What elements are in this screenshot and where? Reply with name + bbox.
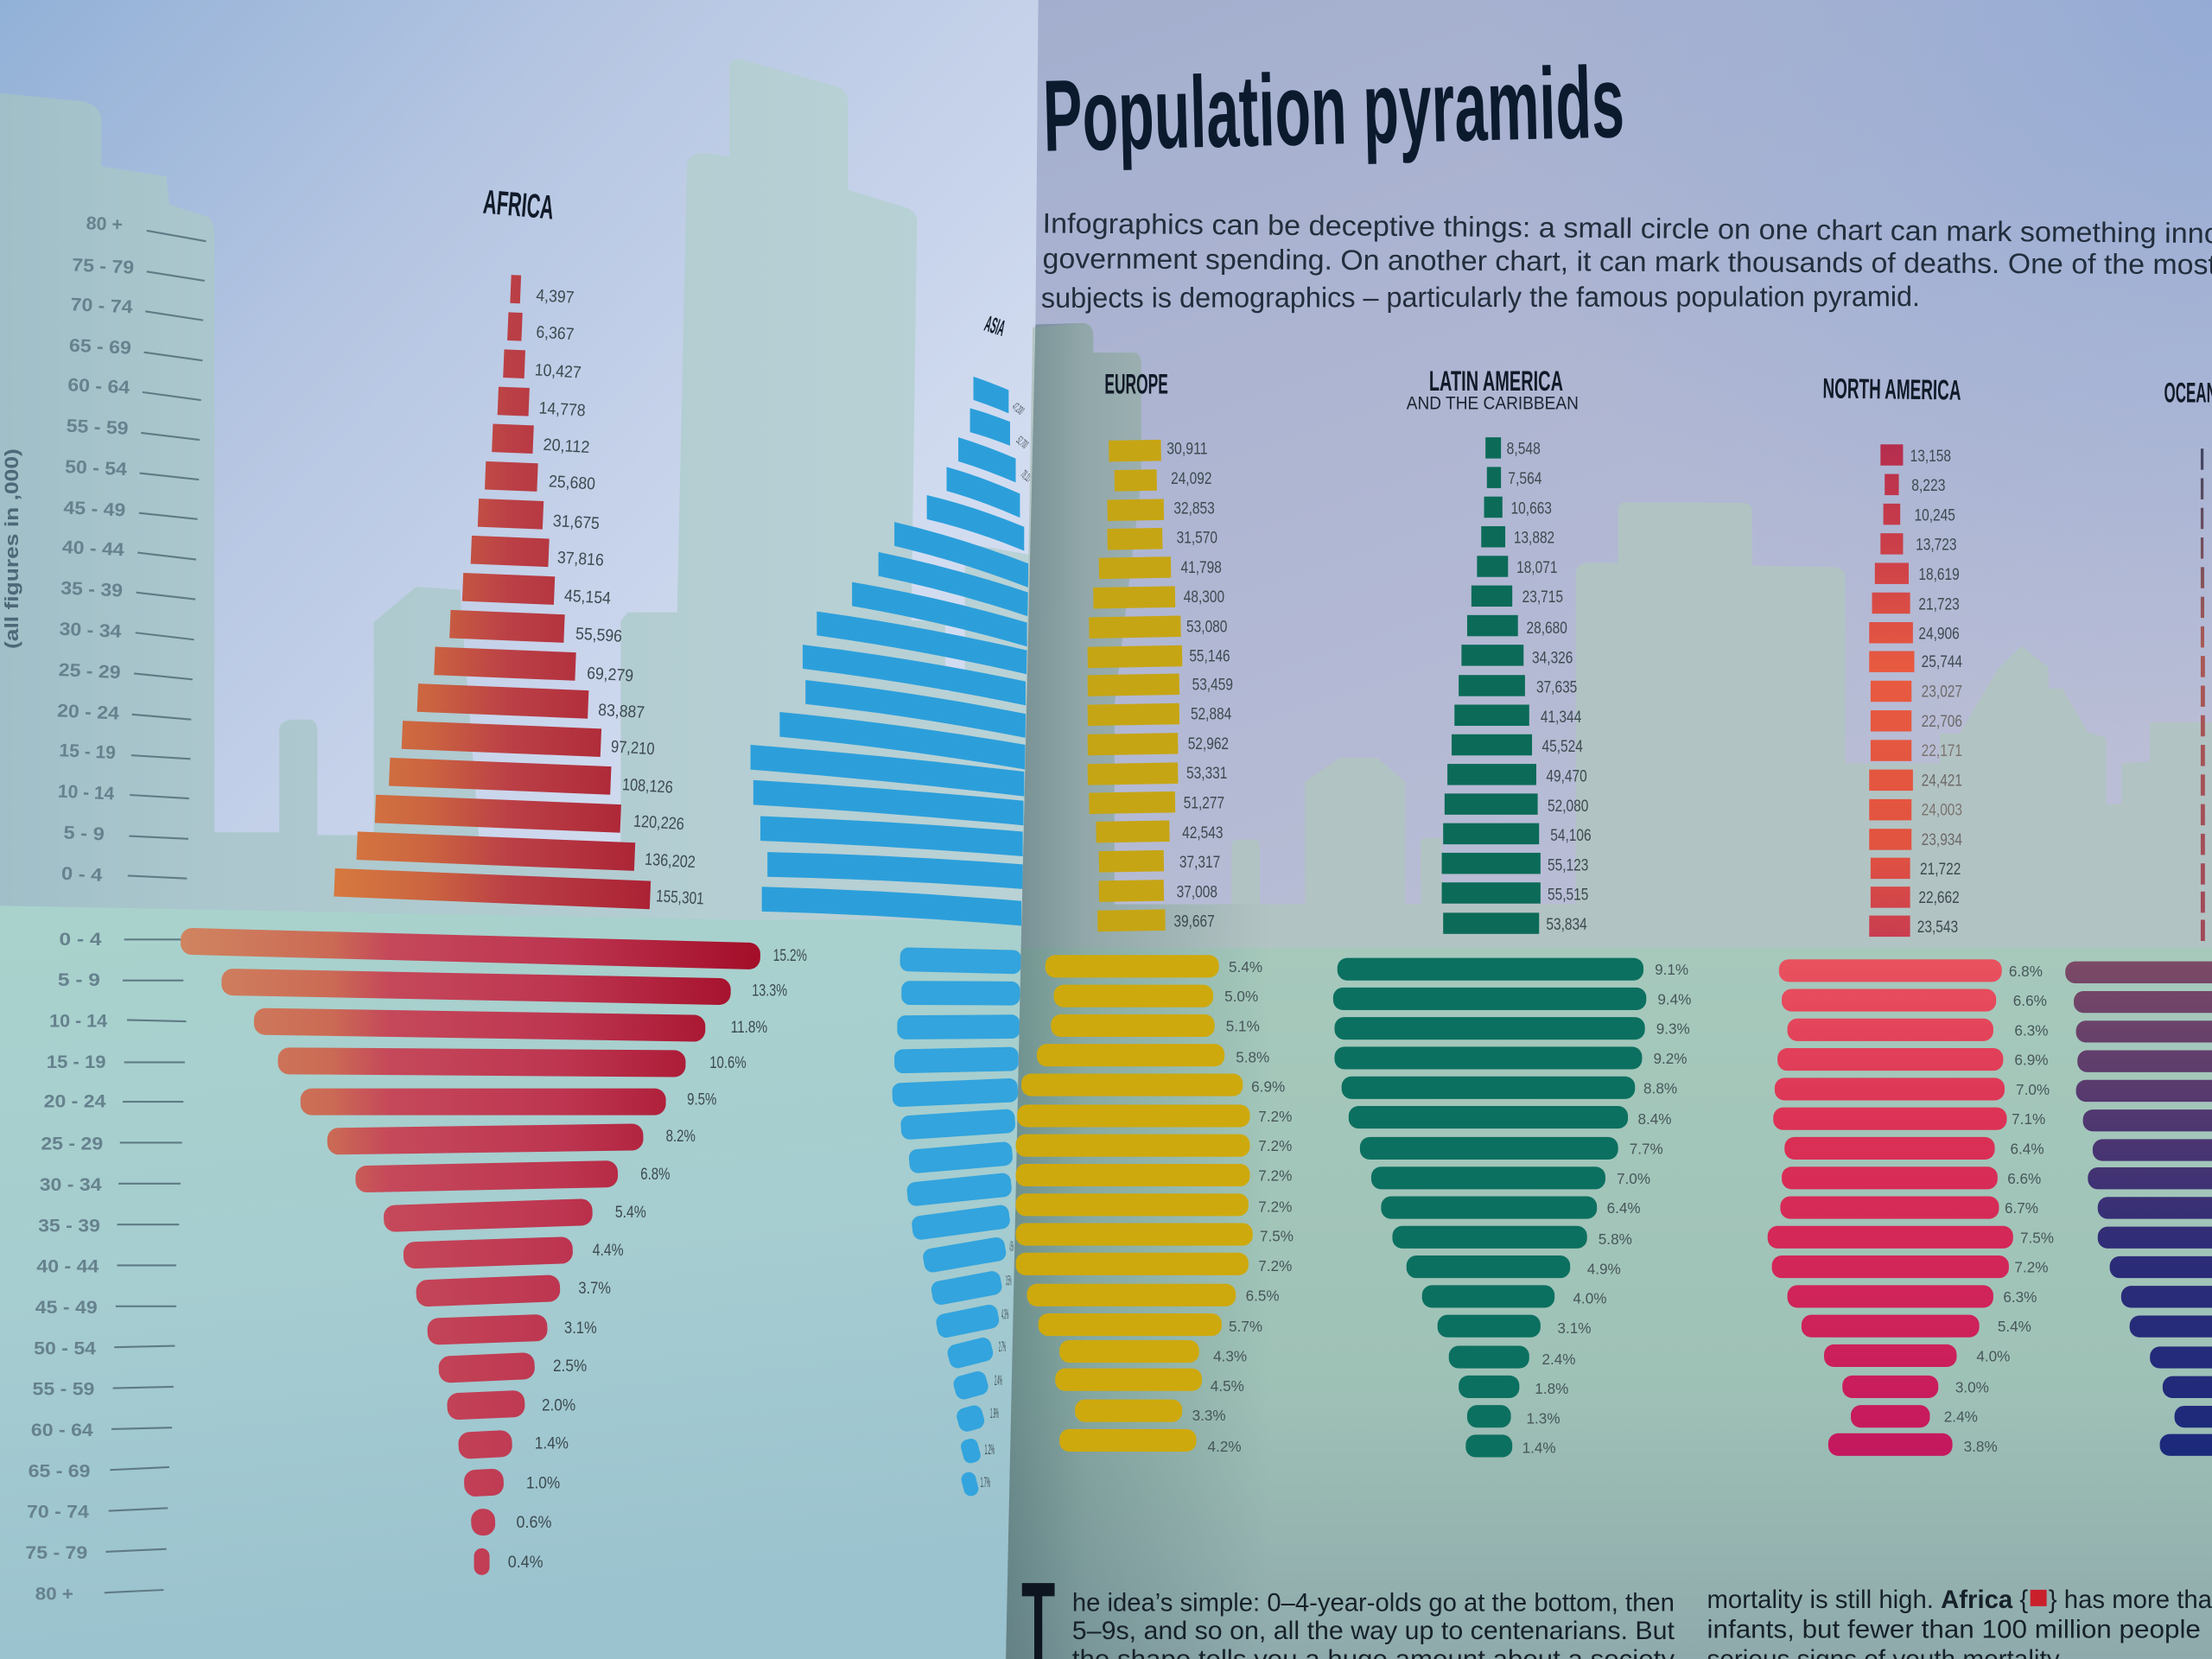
North America percentage values: 4.0% — [1976, 1348, 2010, 1365]
age labels upper — [57, 213, 135, 886]
Europe population values: 48,300 — [1184, 588, 1224, 607]
Africa population values: 14,778 — [538, 398, 586, 421]
panel: Africa pyramid — [181, 184, 807, 1575]
Latin America percentage values: 7.7% — [1630, 1141, 1663, 1158]
North America percentage values — [1944, 963, 2054, 1455]
Africa population values: 45,154 — [563, 587, 612, 608]
Latin America population values: 55,515 — [1548, 886, 1588, 905]
North America percentage values: 6.6% — [2007, 1170, 2041, 1187]
age labels upper: 45 - 49 — [63, 498, 126, 520]
Europe percentage values: 7.2% — [1258, 1137, 1292, 1154]
age labels upper: 25 - 29 — [58, 660, 121, 683]
panel: Europe pyramid — [1016, 368, 1294, 1455]
Asia population bars — [751, 377, 1028, 925]
heading: Europe: EUROPE — [1104, 368, 1168, 400]
Latin America percentage values: 8.8% — [1643, 1079, 1677, 1096]
Asia percentage values: 1.2% — [985, 1442, 995, 1458]
column one: 5–9s, and so on, all the way up to centenarians. But — [1072, 1617, 1675, 1645]
Europe population values: 55,146 — [1189, 647, 1230, 666]
Latin America percentage bars — [1333, 958, 1646, 1458]
Africa population values: 136,202 — [645, 850, 696, 872]
Africa percentage values: 6.8% — [640, 1165, 671, 1184]
Asia population values — [1010, 400, 1035, 485]
Africa percentage values: 8.2% — [666, 1127, 696, 1146]
Europe population values — [1166, 440, 1233, 931]
North America percentage values: 5.4% — [1998, 1318, 2031, 1335]
Europe population values: 41,798 — [1181, 558, 1222, 577]
North America population values: 13,158 — [1910, 447, 1951, 466]
Europe percentage values: 5.8% — [1236, 1048, 1269, 1065]
Europe population values: 52,884 — [1191, 705, 1231, 724]
Europe percentage values: 7.2% — [1258, 1167, 1292, 1185]
column one: he idea’s simple: 0–4-year-olds go at the bottom, then — [1072, 1588, 1675, 1617]
North America percentage values: 3.8% — [1964, 1438, 1998, 1455]
North America percentage values: 6.6% — [2013, 992, 2047, 1009]
body text: drop cap and two columns — [1021, 1559, 2212, 1659]
subheading: and the Caribbean: AND THE CARIBBEAN — [1407, 393, 1579, 413]
Europe population values: 31,570 — [1177, 529, 1217, 548]
age axis: upper left — [57, 213, 206, 886]
age ticks lower — [105, 939, 187, 1592]
Africa population values: 10,427 — [534, 360, 582, 383]
North America population values: 23,543 — [1917, 918, 1958, 937]
Africa percentage values: 1.0% — [526, 1473, 560, 1492]
Latin America percentage values: 9.3% — [1656, 1020, 1690, 1038]
Latin America percentage values: 9.4% — [1657, 990, 1691, 1007]
Latin America population values: 37,635 — [1536, 678, 1577, 697]
Africa percentage bars — [181, 928, 760, 1575]
Africa population values: 6,367 — [536, 323, 575, 344]
Latin America percentage values — [1522, 961, 1691, 1457]
skyline: right page buildings — [1021, 323, 2212, 959]
Latin America percentage values: 1.8% — [1535, 1380, 1568, 1397]
Europe percentage values: 5.1% — [1226, 1017, 1260, 1034]
Latin America population values: 53,834 — [1546, 915, 1587, 934]
spine shadow — [1006, 323, 1269, 1659]
Africa percentage values: 2.5% — [553, 1357, 587, 1376]
Africa population values: 120,226 — [632, 812, 685, 834]
panel: Oceania pyramid — [2065, 376, 2212, 1456]
Oceania population bars — [2201, 448, 2205, 941]
North America percentage values: 2.4% — [1944, 1408, 1978, 1426]
age labels lower: 40 - 44 — [36, 1257, 99, 1277]
Latin America population values: 54,106 — [1550, 826, 1592, 845]
Africa population values: 97,210 — [610, 737, 655, 759]
Africa percentage values: 5.4% — [615, 1203, 646, 1222]
intro paragraph: government spending. On another chart, it can mark thousands of deaths. One of the most — [1042, 242, 2212, 280]
column two — [1707, 1579, 2212, 1659]
North America percentage values: 6.8% — [2009, 963, 2043, 980]
Europe percentage values: 5.7% — [1229, 1318, 1262, 1335]
Europe percentage values: 7.5% — [1260, 1228, 1294, 1245]
infographic canvas: magazine spread: 78,117 — [1018, 467, 1035, 485]
Latin America percentage values: 5.8% — [1599, 1230, 1632, 1248]
Africa percentage values: 13.3% — [752, 982, 787, 1001]
panel: North America pyramid — [1768, 372, 2054, 1456]
North America population values — [1910, 447, 1962, 937]
Latin America population values: 55,123 — [1548, 855, 1588, 874]
age labels lower: 80 + — [35, 1584, 73, 1604]
panel: Asia pyramid: 2.7% — [999, 1339, 1006, 1355]
Oceania percentage bars — [2065, 962, 2212, 1456]
age labels lower: 75 - 79 — [25, 1543, 87, 1563]
North America population values: 21,723 — [1918, 594, 1960, 613]
age labels upper: 70 - 74 — [70, 295, 133, 317]
panel: Asia pyramid: 4.5% — [1009, 1239, 1014, 1255]
axis note: all figures in thousands: (all figures in ,000) — [1, 448, 22, 649]
Latin America population values: 52,080 — [1548, 797, 1588, 816]
Latin America population values: 28,680 — [1527, 619, 1567, 638]
age labels upper: 10 - 14 — [57, 782, 115, 804]
age labels lower: 70 - 74 — [27, 1503, 89, 1522]
North America percentage values: 7.1% — [2012, 1110, 2045, 1128]
North America population values: 22,706 — [1922, 712, 1962, 731]
Europe percentage values: 4.2% — [1208, 1438, 1242, 1455]
Europe percentage values: 4.5% — [1211, 1377, 1244, 1395]
Asia population values: 52,700 — [1014, 434, 1031, 451]
age labels lower: 60 - 64 — [31, 1421, 93, 1440]
Europe population bars — [1088, 440, 1182, 931]
North America population values: 18,619 — [1918, 565, 1960, 584]
Latin America population bars — [1442, 437, 1541, 934]
Africa percentage values: 11.8% — [731, 1018, 767, 1037]
column one — [1072, 1588, 1675, 1659]
Asia percentage values: 1.7% — [981, 1475, 990, 1491]
North America percentage values: 7.0% — [2016, 1081, 2050, 1098]
Europe percentage values: 6.5% — [1246, 1287, 1280, 1304]
age labels upper: 50 - 54 — [65, 457, 128, 480]
Europe percentage bars — [1016, 955, 1253, 1452]
Latin America percentage values: 1.3% — [1527, 1409, 1560, 1427]
Africa population bars — [334, 275, 651, 909]
age labels lower: 55 - 59 — [33, 1380, 95, 1400]
North America population values: 25,744 — [1922, 652, 1962, 671]
North America population values: 24,003 — [1922, 801, 1962, 820]
age labels upper: 60 - 64 — [67, 375, 130, 397]
Latin America population values: 7,564 — [1508, 469, 1542, 488]
North America population values: 23,934 — [1922, 830, 1962, 849]
Europe population values: 24,092 — [1171, 469, 1211, 488]
Africa population values: 108,126 — [621, 775, 673, 798]
heading: North America: NORTH AMERICA — [1822, 372, 1961, 406]
Europe population values: 37,317 — [1179, 853, 1220, 872]
North America percentage bars — [1768, 959, 2013, 1456]
age labels upper: 35 - 39 — [60, 578, 124, 601]
age labels lower — [25, 930, 107, 1604]
age labels lower: 35 - 39 — [38, 1216, 100, 1236]
Europe percentage values: 4.3% — [1213, 1348, 1247, 1365]
age labels upper: 5 - 9 — [63, 823, 105, 844]
North America population bars — [1869, 444, 1915, 937]
age labels upper: 65 - 69 — [69, 336, 132, 359]
North America population values: 21,722 — [1920, 860, 1961, 879]
Africa percentage values: 9.5% — [687, 1090, 716, 1109]
North America population values: 22,662 — [1918, 888, 1960, 907]
Europe population values: 53,459 — [1192, 675, 1233, 694]
Latin America population values: 8,548 — [1507, 440, 1541, 459]
age labels upper: 20 - 24 — [57, 701, 120, 724]
Europe population values: 53,080 — [1186, 617, 1227, 636]
panel: Asia pyramid — [751, 310, 1035, 1497]
North America percentage values: 6.4% — [2011, 1141, 2044, 1158]
heading: Africa: AFRICA — [482, 184, 556, 227]
Asia percentage values: 1.9% — [990, 1406, 999, 1421]
Africa percentage values: 2.0% — [542, 1396, 575, 1415]
panel: right page background with skyline — [1006, 0, 2212, 1659]
age labels upper: 75 - 79 — [72, 256, 135, 278]
column two: infants, but fewer than 100 million people — [1707, 1616, 2201, 1644]
Latin America percentage values: 3.1% — [1557, 1319, 1591, 1337]
Latin America population values: 18,071 — [1516, 558, 1557, 577]
Africa percentage values: 4.4% — [593, 1241, 624, 1260]
Africa population values: 69,279 — [587, 664, 634, 686]
age labels upper: 80 + — [86, 213, 124, 235]
age labels lower: 50 - 54 — [34, 1338, 96, 1358]
age labels upper: 30 - 34 — [59, 620, 122, 642]
age ticks upper — [128, 231, 206, 879]
North America population values: 8,223 — [1911, 476, 1946, 495]
Europe population values: 42,543 — [1182, 823, 1224, 842]
North America percentage values: 6.7% — [2005, 1199, 2038, 1217]
Latin America percentage values: 7.0% — [1617, 1170, 1650, 1187]
age axis: lower left — [25, 930, 187, 1604]
Latin America percentage values: 4.0% — [1573, 1290, 1606, 1307]
Latin America population values: 34,326 — [1532, 648, 1573, 667]
Europe percentage values: 5.4% — [1229, 958, 1262, 976]
Latin America population values: 49,470 — [1546, 766, 1587, 785]
Africa percentage values: 1.4% — [535, 1434, 569, 1453]
Europe percentage values: 3.3% — [1192, 1407, 1226, 1424]
Africa population values — [534, 286, 704, 909]
Latin America population values: 13,882 — [1514, 529, 1554, 548]
panel: Asia pyramid: ASIA — [982, 310, 1008, 341]
North America population values: 24,906 — [1918, 625, 1960, 644]
North America percentage values: 6.3% — [2003, 1288, 2037, 1306]
Europe population values: 51,277 — [1184, 794, 1224, 813]
Africa population values: 155,301 — [656, 887, 704, 909]
North America percentage values: 3.0% — [1955, 1378, 1989, 1395]
North America population values: 24,421 — [1922, 771, 1962, 790]
Africa percentage values: 10.6% — [709, 1053, 747, 1072]
Africa percentage values — [508, 946, 807, 1572]
Europe population values: 32,853 — [1173, 499, 1215, 518]
Europe population values: 37,008 — [1177, 882, 1217, 901]
Africa percentage values: 15.2% — [773, 946, 807, 965]
Asia percentage bars — [892, 947, 1021, 1497]
Africa population values: 25,680 — [548, 472, 596, 494]
age labels lower: 0 - 4 — [60, 930, 102, 950]
North America percentage values: 7.5% — [2020, 1229, 2054, 1246]
Europe percentage values: 7.2% — [1258, 1257, 1292, 1274]
Africa population values: 55,596 — [575, 625, 623, 646]
Latin America percentage values: 6.4% — [1607, 1199, 1641, 1217]
title: Population pyramids — [1042, 45, 1625, 173]
Africa percentage values: 0.6% — [517, 1513, 551, 1532]
Latin America population values: 45,524 — [1541, 737, 1583, 756]
Europe percentage values: 6.9% — [1251, 1078, 1285, 1096]
Europe percentage values: 7.2% — [1258, 1108, 1292, 1125]
North America population values: 10,245 — [1915, 505, 1955, 524]
age labels lower: 45 - 49 — [35, 1298, 98, 1318]
panel: Latin America pyramid — [1333, 365, 1691, 1458]
Europe population values: 52,962 — [1188, 734, 1229, 753]
Latin America percentage values: 1.4% — [1522, 1440, 1556, 1457]
Africa population values: 4,397 — [536, 286, 575, 308]
Europe population values: 39,667 — [1173, 912, 1215, 931]
age labels upper: 55 - 59 — [66, 416, 129, 439]
North America percentage values: 6.9% — [2014, 1052, 2048, 1069]
Africa percentage values: 3.7% — [578, 1279, 611, 1298]
Africa population values: 37,816 — [556, 548, 604, 570]
age labels lower: 15 - 19 — [47, 1052, 106, 1072]
Latin America percentage values: 9.2% — [1653, 1050, 1688, 1067]
age labels lower: 65 - 69 — [29, 1461, 91, 1481]
Europe percentage values: 5.0% — [1224, 988, 1258, 1005]
Africa percentage values: 3.1% — [564, 1319, 597, 1338]
heading: Latin America: LATIN AMERICA — [1429, 365, 1563, 397]
intro paragraph: Infographics can be deceptive things: a small circle on one chart can mark something inno — [1042, 207, 2212, 249]
Africa population values: 31,675 — [552, 512, 601, 533]
North America population values: 22,171 — [1922, 741, 1962, 760]
age labels lower: 10 - 14 — [49, 1012, 107, 1032]
Europe population values: 53,331 — [1186, 764, 1227, 783]
Asia population values: 47,200 — [1010, 400, 1027, 417]
North America percentage values: 7.2% — [2014, 1259, 2048, 1276]
panel: Asia pyramid: 3.5% — [1006, 1273, 1012, 1288]
Latin America population values: 10,663 — [1511, 499, 1552, 518]
Asia percentage values: 2.4% — [995, 1373, 1002, 1389]
Latin America percentage values: 4.9% — [1587, 1260, 1621, 1277]
age labels lower: 5 - 9 — [58, 970, 100, 990]
Africa population values: 83,887 — [598, 701, 645, 722]
Africa percentage values: 0.4% — [508, 1553, 543, 1572]
Europe population values: 30,911 — [1166, 440, 1208, 459]
age labels upper: 40 - 44 — [61, 537, 124, 560]
North America population values: 23,027 — [1922, 683, 1962, 702]
age labels upper: 0 - 4 — [61, 864, 103, 886]
column two: mortality is still high. Africa {■} has more tha — [1707, 1579, 2212, 1616]
North America percentage values: 6.3% — [2014, 1021, 2048, 1039]
Latin America population values: 41,344 — [1541, 708, 1581, 727]
Latin America population values: 23,715 — [1522, 588, 1563, 607]
Latin America percentage values: 8.4% — [1638, 1110, 1672, 1128]
intro paragraph — [1041, 207, 2212, 314]
age labels lower: 25 - 29 — [41, 1135, 103, 1154]
age labels lower: 30 - 34 — [40, 1175, 102, 1195]
Latin America percentage values: 2.4% — [1541, 1351, 1576, 1368]
Europe percentage values — [1192, 958, 1294, 1455]
Latin America percentage values: 9.1% — [1655, 961, 1688, 978]
age labels upper: 15 - 19 — [59, 741, 117, 763]
panel: Asia pyramid: 4.3% — [1001, 1307, 1008, 1323]
age labels lower: 20 - 24 — [44, 1092, 106, 1112]
Latin America population values — [1507, 440, 1592, 934]
panel: left page background with skyline — [0, 0, 1072, 1659]
Europe percentage values: 7.2% — [1258, 1198, 1292, 1215]
Asia percentage values — [981, 1239, 1014, 1491]
intro paragraph: subjects is demographics – particularly the famous population pyramid. — [1041, 280, 1920, 314]
Africa population values: 20,112 — [543, 435, 590, 457]
North America population values: 13,723 — [1916, 536, 1957, 555]
skyline: left page buildings — [0, 59, 1044, 931]
